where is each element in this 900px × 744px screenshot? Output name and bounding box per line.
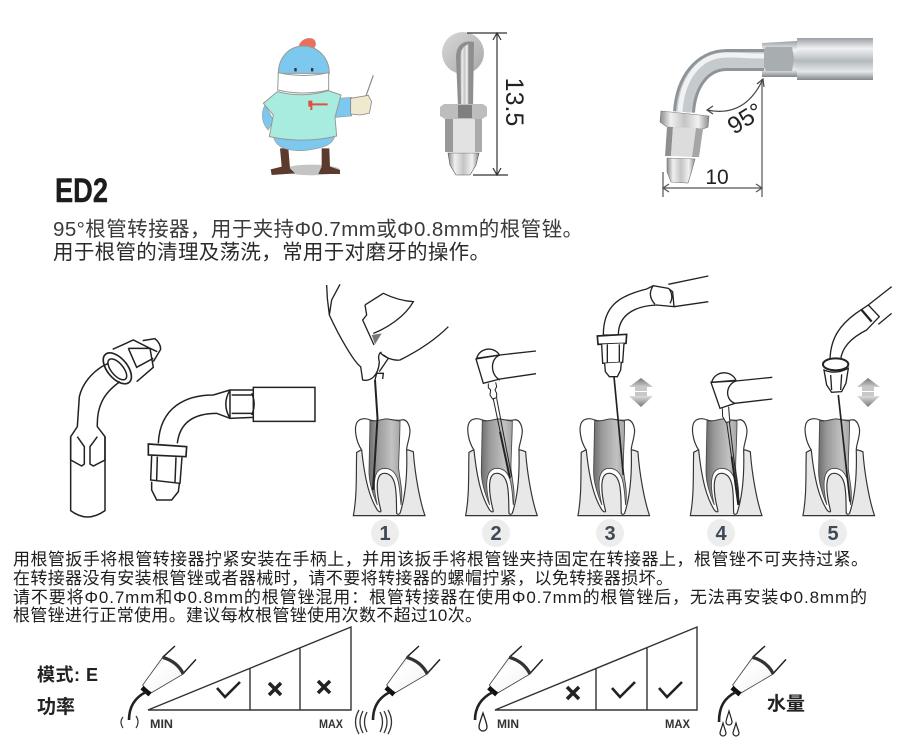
angle arc xyxy=(707,79,764,114)
mascot left arm xyxy=(262,105,273,130)
mascot right arm xyxy=(335,97,352,117)
icon: line drawing of tip, handle down xyxy=(71,339,161,517)
tip xyxy=(373,692,390,720)
nose xyxy=(143,339,161,362)
label: power: 功率 xyxy=(37,696,75,718)
step 3: angled tip with file xyxy=(578,276,708,547)
badge 2: 2 xyxy=(490,523,502,545)
icon: handpiece low vibration xyxy=(121,646,196,728)
badge 5: 5 xyxy=(827,523,839,545)
badge 3 xyxy=(596,519,624,547)
collar facet xyxy=(458,105,472,118)
MIN label: MIN xyxy=(497,717,519,731)
handpiece head xyxy=(386,646,440,695)
tooth 4 xyxy=(690,419,762,516)
mascot mask xyxy=(278,73,329,93)
scaler tip xyxy=(597,276,708,475)
hex centre facet xyxy=(453,119,475,152)
handpiece xyxy=(476,349,536,478)
tooth 5 xyxy=(803,419,875,516)
step 4: contra-angle with file deep in canal xyxy=(690,373,772,547)
neck highlight xyxy=(680,55,764,112)
MAX label: MAX xyxy=(665,717,690,731)
nose xyxy=(152,482,179,500)
step 5: curved tip with file xyxy=(803,287,892,547)
instruction line 4: 根管锉进行正常使用。建议每枚根管锉使用次数不超过10次。 xyxy=(13,605,482,625)
small waves xyxy=(121,716,138,728)
icon: handpiece high water xyxy=(719,646,786,736)
badge 1 xyxy=(371,519,399,547)
icon: line drawing of tip, handle right xyxy=(148,387,315,500)
tooth 2 xyxy=(466,419,537,516)
mascot eyes xyxy=(294,68,313,71)
handpiece head xyxy=(732,646,786,695)
mascot head xyxy=(278,46,329,73)
hex right facet xyxy=(475,119,482,152)
neck midtone xyxy=(684,60,764,112)
water drops xyxy=(720,711,739,736)
file xyxy=(373,380,378,490)
badge 4 xyxy=(707,519,735,547)
instruction line 2: 在转接器没有安装根管锉或者器械时，请不要将转接器的螺帽拧紧，以免转接器损坏。 xyxy=(13,569,673,588)
badge 4: 4 xyxy=(715,523,727,545)
label: mode E: 模式: E xyxy=(37,665,98,685)
angle label: 95° xyxy=(723,98,768,140)
badge 3: 3 xyxy=(604,523,616,545)
chart: power scale xyxy=(148,627,351,731)
check xyxy=(659,682,682,697)
mascot logo xyxy=(308,101,328,110)
tip xyxy=(719,692,736,722)
description line 1: 95°根管转接器，用于夹持Φ0.7mm或Φ0.8mm的根管锉。 xyxy=(53,218,583,241)
tooth 1 xyxy=(353,419,425,516)
cross xyxy=(318,681,330,693)
shank xyxy=(456,42,474,106)
mascot pointer xyxy=(366,75,373,96)
badge 1: 1 xyxy=(379,523,391,545)
shank xyxy=(797,38,873,80)
triangle xyxy=(495,627,697,710)
handle xyxy=(253,387,315,421)
large waves xyxy=(356,710,392,734)
MAX label: MAX xyxy=(319,717,343,731)
handpiece head xyxy=(142,646,196,695)
mascot legs xyxy=(271,148,340,175)
dimension lines xyxy=(467,33,508,175)
disc xyxy=(442,32,484,74)
cross xyxy=(269,683,281,695)
step 2: contra-angle with file xyxy=(466,349,537,547)
text: instructions xyxy=(13,550,868,625)
neck base xyxy=(684,60,764,112)
instruction line 1: 用根管扳手将根管转接器拧紧安装在手柄上，并用该扳手将根管锉夹持固定在转接器上，根管锉不可夹持过紧。 xyxy=(13,550,868,569)
mascot shirt xyxy=(263,91,341,140)
icon: mascot pointing xyxy=(262,38,373,175)
icon: handpiece low water xyxy=(475,646,543,731)
step 1: hand placing file xyxy=(327,284,448,547)
check xyxy=(612,682,635,697)
water drop xyxy=(479,713,487,731)
hex centre facet xyxy=(671,127,696,157)
cross xyxy=(567,687,579,699)
hex body xyxy=(113,340,153,382)
hex left facet xyxy=(445,119,453,152)
hex left facet xyxy=(665,127,673,156)
hex xyxy=(151,456,182,483)
label: water volume: 水量 xyxy=(767,693,805,715)
flats xyxy=(71,437,105,466)
heading: ED2: ED2 xyxy=(55,172,108,210)
mascot lower body xyxy=(273,135,335,151)
icon: handpiece high vibration xyxy=(356,646,440,734)
dimension label: 13.5 xyxy=(500,78,528,126)
text: description xyxy=(53,218,583,264)
nozzle xyxy=(667,158,695,183)
flat xyxy=(226,390,254,418)
badge 2 xyxy=(482,519,510,547)
collar xyxy=(660,111,709,129)
tube xyxy=(71,363,120,517)
badge 5 xyxy=(819,519,847,547)
dimension lines xyxy=(663,79,762,197)
neck xyxy=(158,390,230,443)
collar xyxy=(440,104,487,119)
tip xyxy=(129,692,146,720)
shank highlight xyxy=(460,44,469,106)
arrows up and down xyxy=(629,378,653,407)
instruction line 3: 请不要将Φ0.7mm和Φ0.8mm的根管锉混用：根管转接器在使用Φ0.7mm的根管锉后，无法再安装Φ0.8mm的 xyxy=(13,587,867,607)
mascot hat xyxy=(298,38,316,48)
mascot shadow xyxy=(283,165,340,175)
handpiece head xyxy=(489,646,543,695)
icon: angled tip front view with 13.5 dimension xyxy=(440,32,528,175)
icon: angled tip side view with 95 degree and 10 dimensions xyxy=(660,38,873,197)
triangle xyxy=(148,627,351,710)
MIN label: MIN xyxy=(150,717,173,731)
hand xyxy=(327,284,448,380)
nozzle xyxy=(448,153,479,175)
hex right facet xyxy=(692,128,703,157)
tip xyxy=(475,692,493,720)
chart: water scale xyxy=(495,627,697,731)
check xyxy=(217,682,240,697)
mascot hand xyxy=(351,95,372,115)
tooth 3 xyxy=(578,419,650,516)
handpiece xyxy=(711,373,772,505)
flat section xyxy=(762,41,797,77)
description line 2: 用于根管的清理及荡洗，常用于对磨牙的操作。 xyxy=(53,241,490,264)
collar xyxy=(148,444,187,457)
nut ring xyxy=(98,348,137,389)
bent neck xyxy=(680,55,764,112)
scaler tip xyxy=(823,287,892,502)
length label: 10 xyxy=(705,166,729,189)
arrows up and down xyxy=(857,378,880,407)
wrench flat xyxy=(762,47,794,71)
